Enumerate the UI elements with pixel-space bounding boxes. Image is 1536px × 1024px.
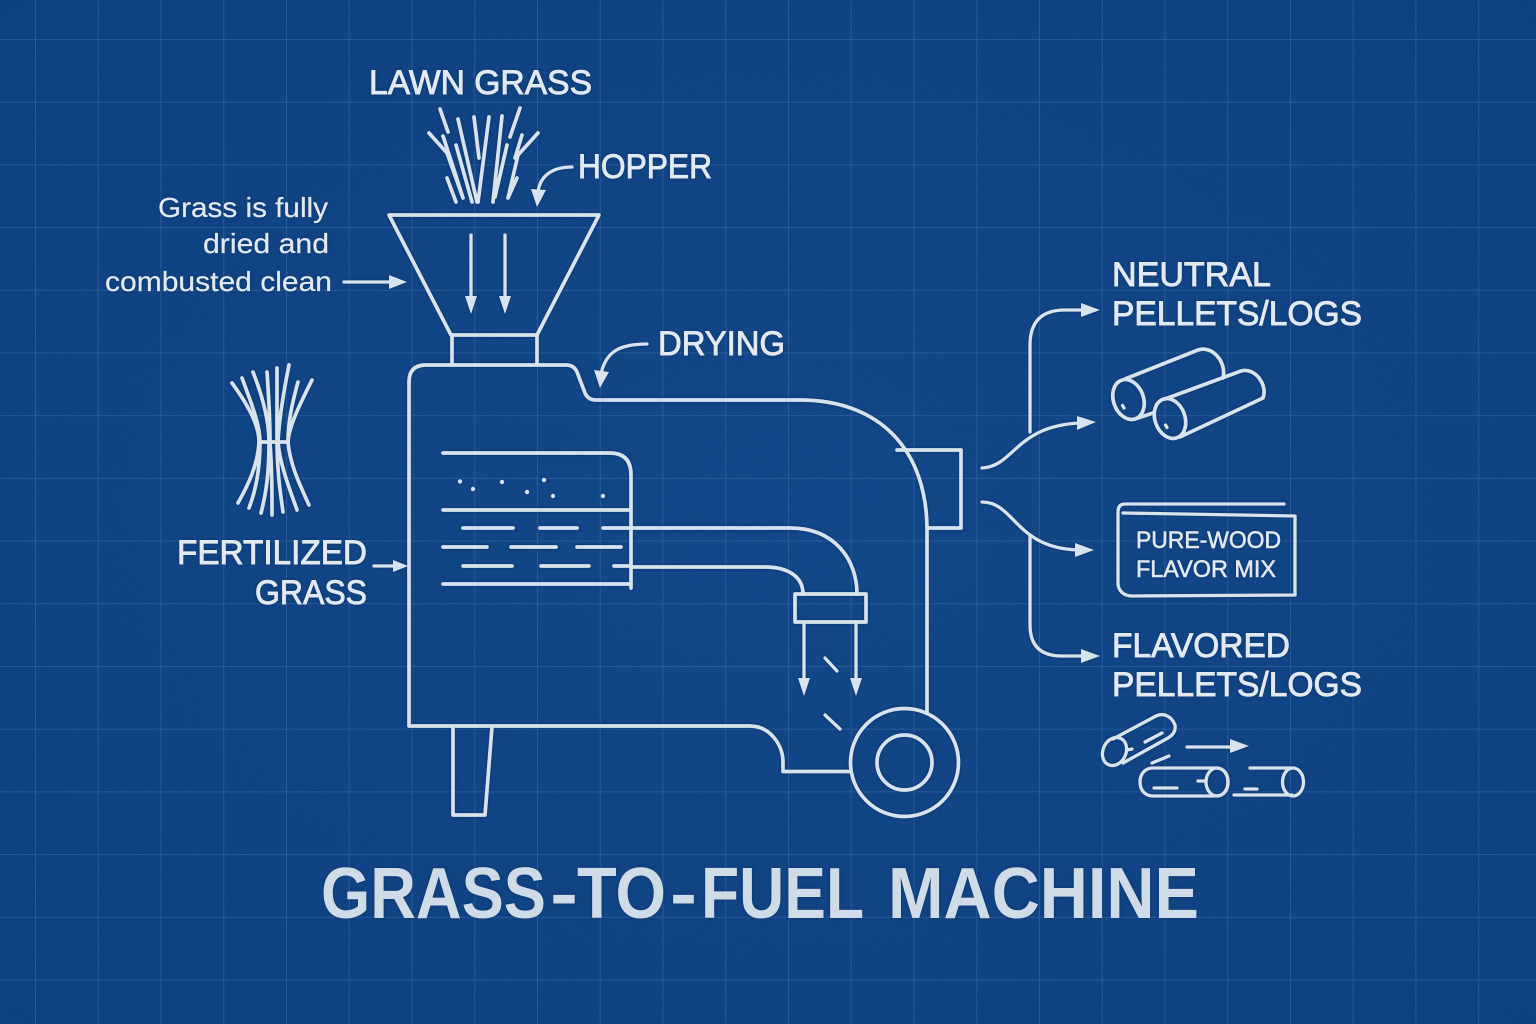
label: fertilized grass: FERTILIZED: [177, 534, 367, 572]
text block: grass note: combusted clean: [105, 266, 332, 297]
hopper funnel: [389, 215, 599, 364]
label: neutral pellets/logs: PELLETS/LOGS: [1112, 295, 1362, 333]
label: flavored pellets/logs: FLAVORED: [1112, 627, 1290, 665]
arrow: note to hopper: [344, 275, 407, 289]
icon: flavored logs: [1098, 715, 1304, 796]
discharge pipes: [631, 528, 866, 729]
box: pure-wood flavor mix: PURE-WOOD: [1136, 527, 1281, 554]
label: neutral pellets/logs: [1112, 256, 1362, 333]
label: flavored pellets/logs: [1112, 627, 1362, 704]
title: TO: [577, 854, 666, 934]
arrow: fertilized grass to body: [374, 560, 408, 572]
title: -: [550, 854, 578, 934]
label: neutral pellets/logs: NEUTRAL: [1112, 256, 1271, 294]
output arrows: [982, 303, 1100, 663]
label: drying: DRYING: [658, 325, 785, 363]
text block: grass note: dried and: [203, 228, 329, 259]
title: GRASS: [321, 854, 546, 934]
machine leg: [453, 727, 492, 815]
label: flavored pellets/logs: PELLETS/LOGS: [1112, 666, 1362, 704]
text block: grass note: [105, 192, 332, 297]
arrow: hopper pointer: [531, 167, 572, 207]
title: FUEL: [701, 854, 863, 934]
wheel: [850, 708, 958, 816]
title: -: [670, 854, 697, 934]
inner drying tank: [443, 453, 631, 588]
box: pure-wood flavor mix: [1118, 504, 1295, 596]
label: hopper: HOPPER: [578, 148, 712, 186]
arrow: drying pointer: [594, 344, 647, 388]
icon: fertilized grass bundle: [232, 365, 312, 515]
machine body: [409, 365, 961, 772]
title: MACHINE: [888, 854, 1199, 934]
icon: neutral logs: [1107, 349, 1264, 443]
label: fertilized grass: GRASS: [255, 574, 367, 612]
box: pure-wood flavor mix: FLAVOR MIX: [1136, 556, 1276, 583]
label: fertilized grass: [177, 534, 367, 612]
text block: grass note: Grass is fully: [158, 192, 328, 223]
icon: falling grass blades: [429, 108, 538, 202]
label: lawn grass: LAWN GRASS: [369, 64, 592, 102]
